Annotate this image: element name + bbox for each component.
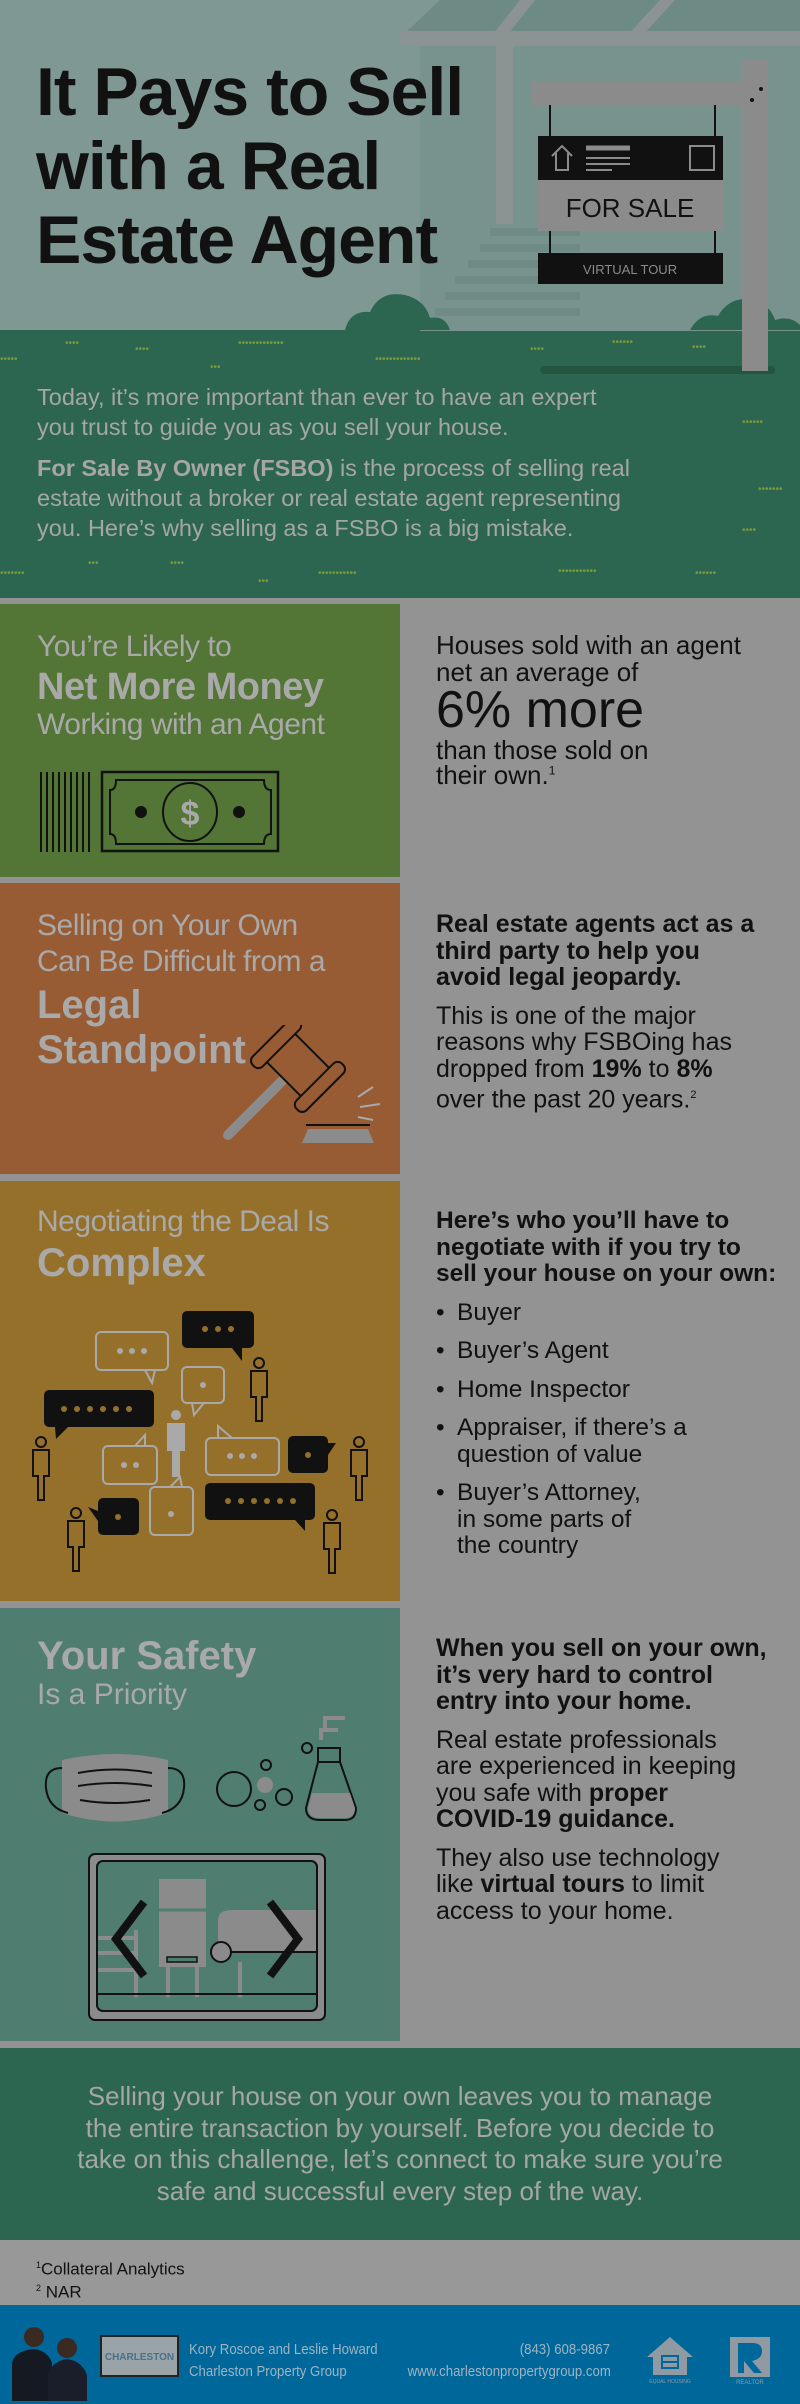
- header scene: •••••••••••: [558, 566, 597, 577]
- text: negotiate list: in some parts of: [457, 1506, 631, 1532]
- icon: gavel: [223, 1025, 380, 1143]
- heading: net more money: Working with an Agent: [37, 708, 324, 741]
- header scene: •••••••: [0, 568, 25, 579]
- text: negotiate list: [436, 1207, 776, 1559]
- text: legal: This is one of the major: [436, 1002, 696, 1030]
- text: safety: you safe with proper: [436, 1778, 668, 1806]
- text: negotiate list: Buyer’s Agent: [457, 1337, 609, 1364]
- title: It Pays to Sell: [36, 54, 463, 130]
- text: safety: are experienced in keeping: [436, 1752, 736, 1780]
- text: 6% more: [436, 630, 741, 790]
- contact names: [189, 2341, 378, 2380]
- header scene: •••••••••••••: [375, 354, 421, 365]
- footer: [0, 2305, 800, 2404]
- heading: complex: Negotiating the Deal Is: [37, 1205, 329, 1238]
- header scene: •••••••: [758, 484, 783, 495]
- header scene: •••: [88, 558, 99, 569]
- callout: closing message: safe and successful every step of the way.: [157, 2176, 643, 2206]
- text: legal: reasons why FSBOing has: [436, 1028, 732, 1056]
- text: legal: over the past 20 years.2: [436, 1085, 696, 1113]
- for sale sign: VIRTUAL TOUR: [583, 262, 677, 277]
- heading: legal: Legal: [37, 983, 141, 1027]
- header scene: [0, 0, 800, 598]
- text: safety: Real estate professionals: [436, 1726, 717, 1754]
- for sale sign: FOR SALE: [566, 193, 694, 223]
- text: negotiate list: •: [436, 1376, 445, 1402]
- text: negotiate list: Buyer’s Attorney,: [457, 1479, 641, 1506]
- callout: closing message: take on this challenge, let’s connect to make sure you’re: [77, 2144, 723, 2174]
- text: safety: They also use technology: [436, 1844, 720, 1872]
- heading: legal: Selling on Your Own: [37, 909, 298, 942]
- intro text: you trust to guide you as you sell your house.: [37, 414, 509, 440]
- text: 6% more: Houses sold with an agent: [436, 630, 741, 660]
- heading: complex: [37, 1205, 329, 1285]
- header scene: ••••••: [612, 337, 634, 348]
- icon: money: $: [181, 795, 200, 833]
- header scene: ••••: [742, 525, 757, 536]
- contact details: [408, 2341, 611, 2380]
- text: legal: avoid legal jeopardy.: [436, 963, 681, 991]
- heading: safety: Is a Priority: [37, 1678, 187, 1711]
- header scene: •••: [210, 362, 221, 373]
- text: safety: entry into your home.: [436, 1687, 692, 1715]
- heading: net more money: [37, 630, 325, 741]
- text: negotiate list: Appraiser, if there’s a: [457, 1414, 687, 1441]
- header scene: ••••: [170, 558, 185, 569]
- header scene: ••••: [692, 342, 707, 353]
- header scene: •••: [258, 576, 269, 587]
- panel: net more money: [0, 604, 741, 877]
- title: with a Real: [36, 128, 380, 204]
- heading: legal: Can Be Difficult from a: [37, 945, 325, 978]
- text: negotiate list: question of value: [457, 1440, 642, 1468]
- contact details: (843) 608-9867: [520, 2341, 610, 2358]
- text: safety: like virtual tours to limit: [436, 1870, 704, 1898]
- footnotes: 1Collateral Analytics: [36, 2260, 185, 2279]
- text: negotiate list: Buyer: [457, 1298, 521, 1326]
- text: safety: access to your home.: [436, 1896, 674, 1924]
- callout: closing message: the entire transaction by yourself. Before you decide to: [86, 2112, 714, 2142]
- agents photo: [12, 2327, 87, 2401]
- heading: legal: Standpoint: [37, 1028, 246, 1072]
- heading: safety: [37, 1634, 256, 1711]
- heading: safety: Your Safety: [37, 1634, 256, 1678]
- contact names: Kory Roscoe and Leslie Howard: [189, 2341, 378, 2358]
- title: [36, 54, 463, 278]
- intro text: you. Here’s why selling as a FSBO is a big mistake.: [37, 515, 573, 541]
- text: negotiate list: •: [436, 1337, 445, 1364]
- contact names: Charleston Property Group: [189, 2363, 347, 2380]
- text: safety: When you sell on your own,: [436, 1634, 767, 1662]
- text: legal: Real estate agents act as a: [436, 910, 754, 938]
- text: legal: [436, 910, 754, 1113]
- icon: money: [40, 770, 280, 852]
- text: 6% more: 6% more: [436, 681, 644, 739]
- header scene: •••••••••••••: [238, 338, 284, 349]
- callout: closing message: Selling your house on your own leaves you to manage: [88, 2081, 712, 2111]
- for sale sign: [531, 60, 768, 371]
- text: safety: it’s very hard to control: [436, 1660, 713, 1688]
- header scene: •••••••••••: [318, 568, 357, 579]
- text: negotiate list: •: [436, 1479, 445, 1506]
- heading: complex: Complex: [37, 1241, 206, 1285]
- header scene: •••••: [0, 354, 18, 365]
- text: negotiate list: sell your house on your own:: [436, 1260, 776, 1287]
- icon: realtor: [730, 2337, 770, 2385]
- intro text: Today, it’s more important than ever to have an expert: [37, 384, 597, 410]
- panel: negotiating: [0, 1181, 776, 1601]
- text: 6% more: their own.1: [436, 760, 555, 790]
- text: negotiate list: the country: [457, 1532, 578, 1559]
- icon: conversation: [32, 1311, 368, 1574]
- icon: mask, soap, virtual tour: [44, 1716, 357, 2021]
- footnotes: [0, 2240, 800, 2305]
- intro text: For Sale By Owner (FSBO) is the process of selling real: [37, 455, 630, 481]
- text: safety: [436, 1634, 767, 1924]
- icon: equal housing: [647, 2337, 693, 2385]
- header scene: ••••••: [695, 568, 717, 579]
- text: negotiate list: Here’s who you’ll have to: [436, 1207, 729, 1234]
- text: safety: COVID-19 guidance.: [436, 1805, 675, 1833]
- text: legal: dropped from 19% to 8%: [436, 1054, 713, 1082]
- text: 6% more: net an average of: [436, 657, 638, 687]
- heading: legal: [37, 909, 326, 1072]
- logo: CHARLESTON: [105, 2352, 174, 2363]
- header scene: ••••: [65, 338, 80, 349]
- header scene: ••••: [135, 344, 150, 355]
- header scene: ••••••: [742, 417, 764, 428]
- panel: legal standpoint: [0, 883, 754, 1174]
- header scene: ••••: [530, 344, 545, 355]
- text: negotiate list: Home Inspector: [457, 1376, 630, 1402]
- callout: closing message: [0, 2048, 800, 2240]
- footnotes: 2 NAR: [36, 2282, 82, 2301]
- icon: equal housing: EQUAL HOUSING: [649, 2379, 691, 2385]
- text: 6% more: than those sold on: [436, 735, 648, 765]
- text: negotiate list: •: [436, 1298, 445, 1326]
- heading: net more money: Net More Money: [37, 666, 323, 708]
- text: negotiate list: •: [436, 1414, 445, 1441]
- intro text: [37, 384, 630, 541]
- heading: net more money: You’re Likely to: [37, 630, 231, 663]
- text: negotiate list: negotiate with if you try to: [436, 1234, 741, 1260]
- title: Estate Agent: [36, 202, 437, 278]
- intro text: estate without a broker or real estate agent representing: [37, 485, 621, 511]
- text: legal: third party to help you: [436, 936, 700, 964]
- panel: safety: [0, 1608, 767, 2041]
- logo: [100, 2335, 179, 2377]
- contact details: www.charlestonpropertygroup.com: [408, 2363, 611, 2380]
